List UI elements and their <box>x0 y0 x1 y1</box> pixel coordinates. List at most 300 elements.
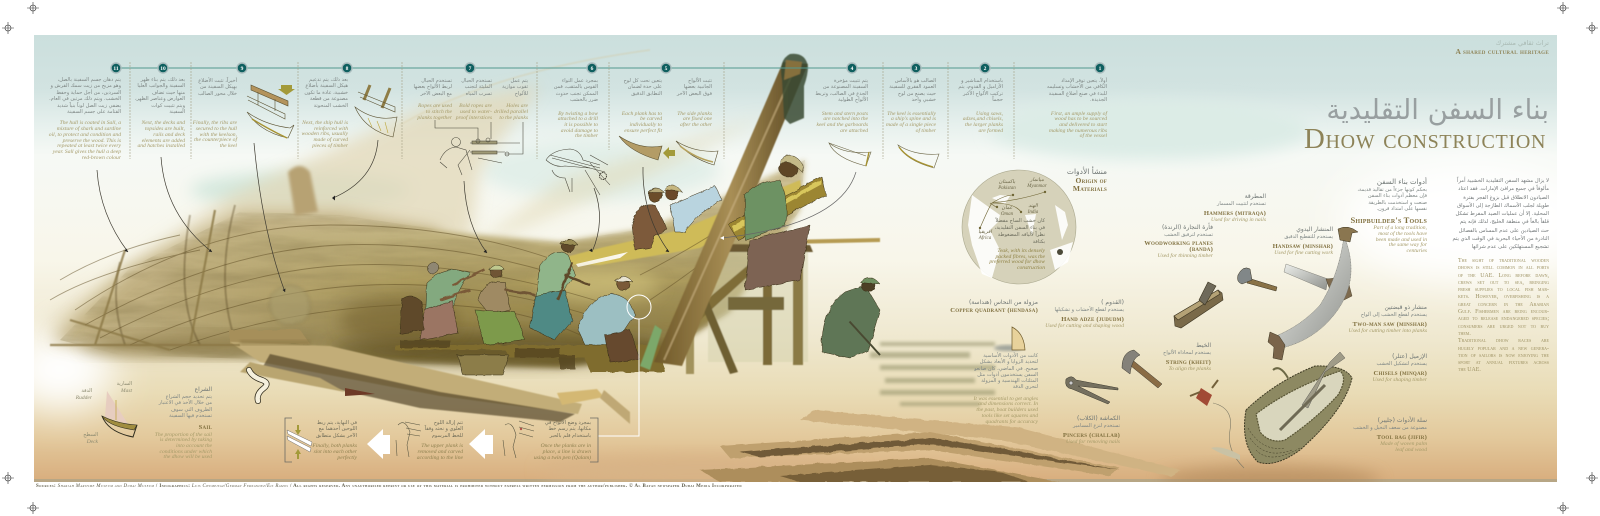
intro text English <box>1458 258 1549 373</box>
map text: في بناء السفن التقليدية، <box>995 225 1045 231</box>
step 5 text side planks: The side planks <box>677 111 712 117</box>
tool label chisels: Chisels (minqar) <box>1374 370 1427 377</box>
step 7 text bold ropes: تستخدم الحبال <box>461 78 492 84</box>
step 6 text: بمجرد عمل التواء <box>562 78 598 84</box>
step 7 text ropes <box>413 78 452 121</box>
tool label hammers: المطرقة <box>1245 193 1266 200</box>
icon: woodworking plane <box>1174 282 1223 328</box>
origin of materials heading: منشأ الأدوات <box>1067 167 1107 176</box>
step 10 text: السفينة والجوانب العليا <box>137 83 185 89</box>
step 11 text: red-brown colour <box>82 155 121 161</box>
intro text Arabic: النادرة من الأحياء البحرية في الوقت الذي يتم <box>1452 236 1549 242</box>
step 5 text carving <box>622 78 662 134</box>
step 11 text: يضفي زيت الصل لوناً بنياً شديد <box>57 103 121 109</box>
step 1 text: wood has to be sourced <box>1054 116 1107 122</box>
step 11 text: preserve the wood. This is <box>63 138 121 144</box>
intro text Arabic: طويلة لجلب الأسماك الطازجة إلى الأسواق <box>1457 203 1549 209</box>
joint text twin pen: using a twin pen (Qalam) <box>534 455 591 461</box>
icon: plank joint bracket <box>285 418 312 462</box>
step 7 text bold ropes: المليئة لتجنب <box>465 84 492 90</box>
step 8 text <box>302 77 348 149</box>
step 2 text: adzes,and chisels, <box>963 116 1003 122</box>
joint text finally: Finally, both planks <box>312 443 357 449</box>
tool label string: الخيط <box>1196 342 1211 349</box>
step numbers: 4 <box>851 66 854 72</box>
tool label handsaw: Handsaw (minshar) <box>1273 243 1333 250</box>
step 7 text ropes: لربط الألواح بعضها <box>413 84 452 90</box>
sail label rudder: Rudder <box>76 394 92 400</box>
step 5 text carving: be carved <box>640 116 662 122</box>
step 6 text: ضرر بالخشب <box>570 97 598 103</box>
joint text finally: perfectly <box>337 455 357 461</box>
map label Africa: Africa <box>979 236 991 240</box>
step 10 text: Next, the decks and <box>142 120 185 126</box>
joint text upper plank: removed and carved <box>418 449 463 455</box>
step numbers: 11 <box>113 66 119 72</box>
map label Africa <box>978 229 992 240</box>
copper quadrant text: السفن يستخدمون أدوات مثل <box>977 372 1038 378</box>
map label Pakistan: Pakistan <box>998 186 1016 190</box>
step numbers: 9 <box>241 66 244 72</box>
step 9 text: with the keelson, <box>200 132 237 138</box>
tool label planes: Woodworking planes <box>1144 240 1213 247</box>
step 4 text: are attached <box>840 128 868 134</box>
sail label deck <box>83 432 98 444</box>
tool label pincers: الكماشة (الكلاب) <box>1077 415 1120 422</box>
brushed hull texture <box>50 155 820 375</box>
copper quadrant text: المثلثات الهندسية و المزولة <box>981 378 1038 384</box>
map label Oman <box>1001 205 1013 216</box>
tools heading and intro: Shipbuilder's Tools <box>1350 215 1427 225</box>
step 10 text: elements are added <box>142 138 185 144</box>
tools heading and intro: فإن معظم أدوات بناء السفن <box>1368 193 1427 199</box>
scaffold <box>686 238 880 374</box>
step 6 text: it is possible to <box>564 122 598 128</box>
squiggle detail <box>249 370 267 401</box>
pointer arrows from steps to hull <box>97 140 856 292</box>
step 1 text: أولاً. يتعين توفر الإمداد <box>1061 78 1107 84</box>
tool label chisels: يستخدم لتشكيل الخشب <box>1376 361 1427 367</box>
step 7 text ropes: مع البعض الآخر <box>420 91 452 97</box>
step 6 text: avoid damage to <box>561 128 598 134</box>
step 3 text: حيث يصنع من لوح <box>898 91 936 97</box>
tool label hand adze <box>1045 299 1124 329</box>
intro text English: hugely popular and a new genera- <box>1458 346 1549 352</box>
tool label string <box>1163 342 1211 372</box>
tool label string: To align the planks <box>1168 366 1211 372</box>
map label Oman: عمان <box>1001 206 1013 211</box>
tool label tool bag: leaf and wood <box>1395 447 1427 453</box>
step 11 text: القتامة على جسم السفينة <box>67 109 121 115</box>
tool label hand adze: Hand adze (jududm) <box>1061 316 1124 323</box>
icon: string reel <box>1190 380 1244 468</box>
step 11 text: الخشب. ويتم ذلك مرتين في العام. <box>49 96 121 102</box>
step 1 text: للبدء في صنع أضلاع السفينة <box>1049 91 1107 97</box>
step 10 text: rails and deck <box>153 132 185 138</box>
tool label tool bag: Made of woven palm <box>1380 441 1427 447</box>
map label Myanmar: ميانمار <box>1030 178 1044 183</box>
step 4 text: Stem and stern posts <box>822 111 868 117</box>
icon: hammer <box>1238 268 1277 291</box>
joint text upper plank <box>416 420 463 461</box>
title Arabic: بناء السفن التقليدية <box>1326 94 1549 126</box>
step 4 text: keel and the garboards <box>816 122 868 128</box>
step 9 text: the counterpiece of <box>194 137 237 143</box>
step 11 text: السردين، من أجل حماية وحفظ <box>56 90 121 96</box>
tool label hand adze: يستخدم لقطع الأخشاب و تشكيلها <box>1054 307 1124 313</box>
step 5 text carving: التطابق الدقيق <box>631 91 662 97</box>
step 2 text: حجماً <box>992 97 1003 103</box>
step 7 text holes: Holes are <box>506 103 528 109</box>
step 5 text carving: Each plank has to <box>622 111 662 117</box>
stern props <box>50 210 240 350</box>
step 2 text: الأزاميل و القدوم، يتم <box>958 84 1003 90</box>
icon: white arrow middle <box>469 429 493 459</box>
joint text finally: في النهاية، يتم ربط <box>317 420 357 426</box>
step 7 text bold ropes: proof interstices <box>456 115 492 121</box>
step 2 text: تركيب الألواح الأكبر <box>963 91 1003 97</box>
step 8 text: Next, the ship hull is <box>302 120 348 126</box>
intro text English: sport at annual fixtures across <box>1458 360 1549 366</box>
step 7 text ropes: تستخدم الحبال <box>421 78 452 84</box>
tool label chisels: Used for shaping timber <box>1372 377 1427 383</box>
stern hull fade <box>50 212 440 355</box>
icon: sail diagram <box>102 391 137 437</box>
tool label planes: فأرة النجارة (الرندة) <box>1162 224 1213 231</box>
tools heading and intro: Part of a long tradition, <box>1373 225 1427 231</box>
tool label string: يستخدم لمحاذاة الألواح <box>1163 350 1211 356</box>
sail text: Sail <box>199 424 212 431</box>
map text: preferred wood for dhow <box>989 259 1045 265</box>
icon: closing bracket <box>590 418 598 462</box>
step markers <box>111 63 1105 73</box>
step 11 text: oil, to protect and condition and <box>49 132 121 138</box>
step 8 text: reinforced with <box>314 126 348 132</box>
step 8 text: wooden ribs, usually <box>302 131 348 137</box>
intro text English: fresh supplies to local fish mar- <box>1458 287 1549 293</box>
tools heading and intro: been made and used in <box>1376 237 1427 243</box>
tools heading and intro: most of the tools have <box>1378 231 1427 237</box>
worker at right with adze <box>822 277 880 358</box>
step 4 text <box>815 78 868 134</box>
map text <box>989 217 1045 271</box>
icon: stage 8 rib diagram <box>355 85 397 137</box>
tools heading and intro: صنعت و استخدمت بالطريقة <box>1368 200 1427 206</box>
icon: handsaw blade <box>1284 264 1352 300</box>
tool label two-man saw: يستخدم لقطع الخشب إلى ألواح <box>1361 312 1427 318</box>
sail text: من خلال الأخذ في الاعتبار <box>159 400 212 406</box>
step 1 text <box>1047 77 1108 139</box>
sail label mast: Mast <box>121 388 132 394</box>
intro text English: great concern in the Arabian <box>1458 302 1549 308</box>
sail text <box>155 386 212 460</box>
step 11 text: يتم دهان جسم السفينة بالصل، <box>58 77 121 83</box>
copper quadrant text: صحيح. في الماضي، كان صانعو <box>974 366 1038 372</box>
origin of materials heading <box>1067 166 1107 193</box>
step 10 text: السفينة <box>169 109 185 115</box>
sail text: into account the <box>176 443 212 449</box>
sail text: the dhow will be used <box>164 454 212 460</box>
step 3 text: الصالب هو بالأساس <box>895 78 936 84</box>
joint text twin pen: place, a line is drawn <box>543 449 591 455</box>
icon: hand adze <box>1122 350 1162 388</box>
intro text English: crews set out to sea, bringing <box>1458 280 1549 286</box>
joint text twin pen: باستخدام قلم بالحبر <box>550 433 591 439</box>
tool label tool bag: مصنوعة من سعف النخيل و الخشب <box>1353 425 1427 431</box>
step 11 text: mixture of shark and sardine <box>57 126 121 132</box>
step 6 text: the timber <box>575 133 598 139</box>
copper quadrant text: It was essential to get angles <box>974 396 1038 402</box>
step 1 text: First, an ample supply of <box>1051 111 1107 117</box>
tool label chisels <box>1372 353 1427 383</box>
credits line: Sources: Sharjah Maritime Museum and Dubai Museum / Infographics: Luis Chumpitaz/German Fernandez/Eis Ramos / All rights reserved. Any unauthorised reprint or use of this material is prohibited without express written permission from the author/publisher. © Al Bayan newspaper Dubai Media Incorporated <box>36 484 742 489</box>
copper quadrant text: quadrants for accuracy <box>985 419 1038 425</box>
tool label tool bag: Tool bag (jifir) <box>1377 434 1427 441</box>
intro text Arabic: الصيادون الانطلاق قبل بزوغ الفجر بفترة <box>1463 195 1549 201</box>
step numbers: 2 <box>984 66 987 72</box>
step 8 text: مصنوعة من قطعة <box>310 96 348 102</box>
tool label tool bag: سلة الأدوات (جليبر) <box>1378 417 1427 424</box>
step 7 text bold ropes: Bold ropes are <box>459 103 492 109</box>
tool label hand adze: (القدوم ) <box>1101 299 1124 306</box>
icon: two-man saw <box>1268 227 1358 360</box>
intro text English: The sight of traditional wooden <box>1458 258 1549 264</box>
copper quadrant text: مزولة من النحاس (هنداسة) <box>969 299 1038 306</box>
arrow heads <box>124 196 724 292</box>
main hull body <box>120 160 805 368</box>
map label Pakistan <box>998 179 1016 190</box>
joint text finally: slot into each other <box>314 449 357 455</box>
step 10 text: topsides are built, <box>145 126 185 132</box>
sail label rudder <box>76 388 92 400</box>
step 9 text <box>192 76 238 149</box>
copper quadrant text: لتحري الدقة <box>1013 384 1038 390</box>
title English: Dhow construction <box>1304 123 1546 155</box>
step 1 text: of the vessel <box>1080 133 1107 139</box>
joint text upper plank: للخط المرسوم <box>432 433 463 439</box>
step 5 text carving: يتعين نحت كل لوح <box>624 78 662 84</box>
joint text twin pen: بمجرد وضع الألواح في <box>545 420 591 426</box>
intro text Arabic <box>1452 176 1549 250</box>
map text: Teak, with its densely <box>997 248 1045 254</box>
step divider rules <box>130 62 1014 159</box>
mast <box>640 54 808 370</box>
intro text Arabic: لا يزال مشهد السفن التقليدية الخشبية أمراً <box>1457 178 1549 184</box>
step 3 text: The keel is essentially <box>887 111 936 117</box>
step 3 text: of timber <box>916 128 936 134</box>
intro text English: consumers are urged not to buy <box>1458 324 1549 330</box>
step 2 text: باستخدام المناشير و <box>961 78 1003 84</box>
step 7 text ropes: planks together <box>417 115 452 121</box>
joint text twin pen <box>534 420 591 461</box>
step 9 text: the keel <box>220 143 237 149</box>
map label Oman: Oman <box>1001 212 1013 216</box>
step 10 text: العوارض وعناصر الظهر، <box>135 96 185 102</box>
tool label handsaw: المنشار اليدوي <box>1296 226 1333 233</box>
step 9 text: خلال محور الصالب <box>198 91 237 97</box>
step 5 text side planks: after the other <box>680 122 712 128</box>
step 5 text side planks: تثبت الألواح <box>688 78 712 84</box>
step 3 text: made of a single piece <box>886 122 936 128</box>
step 5 text side planks: are fixed one <box>683 116 712 122</box>
step 11 text: The hull is coated in Sall, a <box>60 120 121 126</box>
highlight circle and leader <box>598 295 651 436</box>
ship hull <box>40 50 820 375</box>
sail label mast <box>117 381 132 394</box>
map text: نظراً لأليافه المضغوطة <box>998 232 1045 238</box>
joint text upper plank: العلوي و نحته وفقاً <box>425 426 463 432</box>
map label Myanmar: Myanmar <box>1027 184 1047 188</box>
intro text Arabic: حث الصيادين على عدم المساس بالفصائل <box>1459 228 1549 234</box>
step 6 text: attached to a drill <box>558 116 598 122</box>
step 1 text: الجديدة. <box>1090 97 1107 103</box>
joint text upper plank: تتم إزالة اللوح <box>434 420 463 426</box>
tool label hammers <box>1204 193 1266 223</box>
sail label mast: السارية <box>117 381 132 387</box>
step numbers: 3 <box>915 66 918 72</box>
map text: بكثافة <box>1033 239 1045 245</box>
step 10 text: ويتم تثبيت كوات <box>151 103 185 109</box>
step 7 text holes <box>494 78 528 121</box>
step 7 text holes: يتم عمل <box>511 78 528 84</box>
icon: stage 7 stitching diagram <box>435 120 523 175</box>
step numbers: 5 <box>665 66 668 72</box>
step 5 text carving: individually to <box>630 122 662 128</box>
joint text upper plank: The upper plank is <box>421 443 463 449</box>
map label India: India <box>1028 210 1038 214</box>
intro text Arabic: تشجيع المستهلكين على عدم شرائها <box>1472 244 1549 250</box>
intro text English: aged to release endangered species; <box>1458 316 1549 322</box>
step 10 text: and hatches installed <box>137 143 185 149</box>
map label Myanmar <box>1027 177 1047 188</box>
joint text finally <box>312 420 357 461</box>
joint text finally: اللوحين أحدهما مع <box>319 426 357 432</box>
tool label two-man saw: Two-man saw (minshar) <box>1353 321 1427 328</box>
step 9 text: Finally, the ribs are <box>193 120 237 126</box>
step numbers: 10 <box>160 66 166 72</box>
intro text English: Gulf. Fishermen are being encour- <box>1458 309 1549 315</box>
map label India <box>1028 203 1038 214</box>
icon: stage 6 bow drill diagram <box>546 149 610 195</box>
tool label pincers: Used for removing nails <box>1066 439 1120 445</box>
icon: pincers <box>1066 377 1118 404</box>
origin of materials heading: Origin of <box>1076 176 1107 185</box>
intro text English: them. <box>1458 331 1471 337</box>
icon: stage 5 boats <box>619 136 718 165</box>
step 7 text bold ropes: used to water- <box>460 109 492 115</box>
step 5 text carving: ensure perfect fit <box>624 128 662 134</box>
sail text: conditions under which <box>159 449 212 455</box>
step numbers: 6 <box>591 66 594 72</box>
step 5 text side planks <box>676 77 712 128</box>
step 9 text: أخيراً، تثبت الأضلاع <box>198 78 237 84</box>
sail text: is determined by taking <box>160 437 212 443</box>
sail label deck: السطح <box>83 432 98 438</box>
step 1 text: الكافي من الأخشاب وتسليمه <box>1047 84 1107 90</box>
step 11 text: year. Sall gives the hull a deep <box>53 149 121 155</box>
map label Pakistan: باكستان <box>999 180 1015 185</box>
copper quadrant text: tools like set squares and <box>982 413 1038 419</box>
step 8 text: made of curved <box>314 137 348 143</box>
tool label pincers: تستخدم لنزع المسامير <box>1073 423 1120 429</box>
map label Africa: افريقيا <box>978 230 992 235</box>
step 8 text: الخشب المنحوتة <box>314 103 348 109</box>
intro text English: tion of sailors is now enjoying the <box>1458 353 1549 359</box>
step 7 text holes: ثقوب موازية <box>502 84 528 90</box>
step 5 text carving: على حدة لضمان <box>628 84 662 90</box>
tools heading and intro <box>1350 177 1427 254</box>
tool label two-man saw <box>1349 304 1427 334</box>
step 1 text: and delivered to start <box>1059 122 1107 128</box>
icon: stage 4 and 3 boats <box>829 143 939 168</box>
step 8 text: خشبية، عادة ما تكون <box>304 90 348 96</box>
intro text Arabic: مألوفاً في جميع مرافئ الإمارات. فقد اعتاد <box>1458 186 1549 192</box>
tool label pincers: Pincers (challab) <box>1063 432 1120 439</box>
step 2 text: are formed <box>978 128 1003 134</box>
intro text English: of the UAE. Long before dawn, <box>1458 273 1549 279</box>
step 5 text side planks: الجانبية بعضها <box>684 84 712 90</box>
sail label deck: Deck <box>87 438 98 444</box>
joint text upper plank: according to the line <box>417 455 463 461</box>
step 3 text: a ship's spine and is <box>891 116 936 122</box>
tool label planes: Used for thinning timber <box>1158 253 1213 259</box>
step 6 text <box>554 78 598 139</box>
tool label two-man saw: Used for cutting timber into planks <box>1349 328 1427 334</box>
icon: stage 9 rib and keelson diagram <box>247 85 295 138</box>
origin of materials heading: Materials <box>1073 184 1107 193</box>
tool label handsaw <box>1272 226 1333 256</box>
tool label chisels: الإزميل (عتلر) <box>1392 353 1427 360</box>
tool label string: String (kheit) <box>1166 359 1211 366</box>
tool label hammers: Used for driving in nails <box>1211 217 1266 223</box>
intro text English: the UAE. <box>1458 367 1481 373</box>
step 9 text: بهيكل السفينة من <box>200 84 237 90</box>
step 4 text: الجذع في الصالب، وتربط <box>815 91 868 97</box>
tool label planes: (banda) <box>1189 246 1213 253</box>
tools heading and intro: أدوات بناء السفن <box>1377 178 1427 186</box>
tool label tool bag <box>1353 416 1427 453</box>
map text: construction <box>1017 265 1045 271</box>
tools heading and intro: نفسها على امتداد قرون. <box>1377 206 1427 212</box>
copper quadrant text: and dimensions correct. In <box>978 401 1038 407</box>
step 6 text: By twisting a bow <box>558 111 598 117</box>
step 6 text: الممكن تجنب حدوث <box>556 91 598 97</box>
intro text Arabic: المحلية. إلا أن عمليات الصيد المفرط تشكل <box>1456 211 1549 217</box>
map text: كان خشب الساج مفضلاً <box>996 218 1045 224</box>
sail text: تستخدم فيها السفينة <box>169 413 212 419</box>
workers on the deck and beam <box>632 155 826 290</box>
icon: worker with twin pen right <box>503 421 534 458</box>
step 6 text: القوس بالمثقب، فمن <box>554 84 598 90</box>
joint text twin pen: مكانها، يتم رسم خط <box>548 426 591 432</box>
step 4 text: يتم تثبيت مؤخرة <box>834 78 868 84</box>
icon: origin map <box>962 170 1076 284</box>
sail text: الظروف التي سوف <box>171 407 212 413</box>
step 4 text: are notched into the <box>823 116 868 122</box>
step 7 text bold ropes: تسرب المياه <box>466 91 492 97</box>
step numbers <box>113 66 1102 72</box>
intro text English: dhows is still common in all ports <box>1458 265 1549 271</box>
tool label pincers <box>1063 415 1120 445</box>
step 4 text: السفينة المصنوعة من <box>823 84 868 90</box>
copper quadrant text: Copper quadrant (hendasa) <box>950 307 1038 314</box>
step 2 text: the larger planks <box>965 122 1003 128</box>
step 7 text holes: to the planks <box>499 115 528 121</box>
tools heading and intro: بحكم كونها جزءاً من تقاليد قديمة، <box>1357 187 1427 193</box>
copper quadrant text <box>950 299 1038 425</box>
tool label planes: تستخدم لترقيق الخشب <box>1164 232 1213 238</box>
ground planks left <box>230 340 630 424</box>
